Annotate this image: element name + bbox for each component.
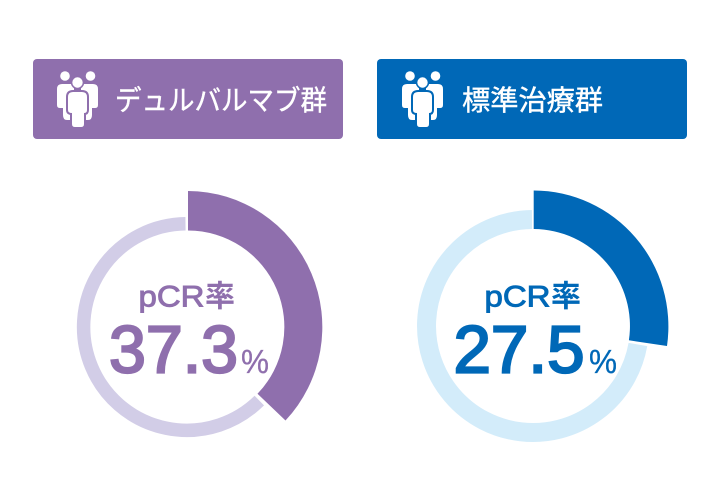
header label: 標準治療群 (462, 85, 603, 116)
panel: standard treatment group header (377, 59, 687, 139)
panel: durvalumab group header (33, 59, 343, 139)
pCR label: pCR (138, 280, 204, 314)
value number: 37.3 (109, 312, 238, 388)
header label: デュルバルマブ群 (115, 85, 327, 116)
icon: group of people (402, 71, 443, 127)
value number: 27.5 (454, 312, 584, 388)
percent sign: % (589, 343, 617, 380)
header background purple (33, 59, 343, 139)
value arc 27.5% (534, 190, 668, 346)
remainder ring (84, 224, 259, 430)
remainder ring (427, 220, 638, 432)
header background blue (377, 59, 687, 139)
chart: durvalumab donut (84, 191, 322, 430)
chart: standard treatment donut (427, 190, 668, 432)
percent sign: % (241, 343, 269, 380)
pCR kanji: 率 (205, 280, 235, 314)
pCR kanji: 率 (551, 280, 581, 314)
value arc 37.3% (188, 191, 322, 420)
pCR label: pCR (484, 280, 550, 314)
icon: group of people (57, 71, 98, 127)
